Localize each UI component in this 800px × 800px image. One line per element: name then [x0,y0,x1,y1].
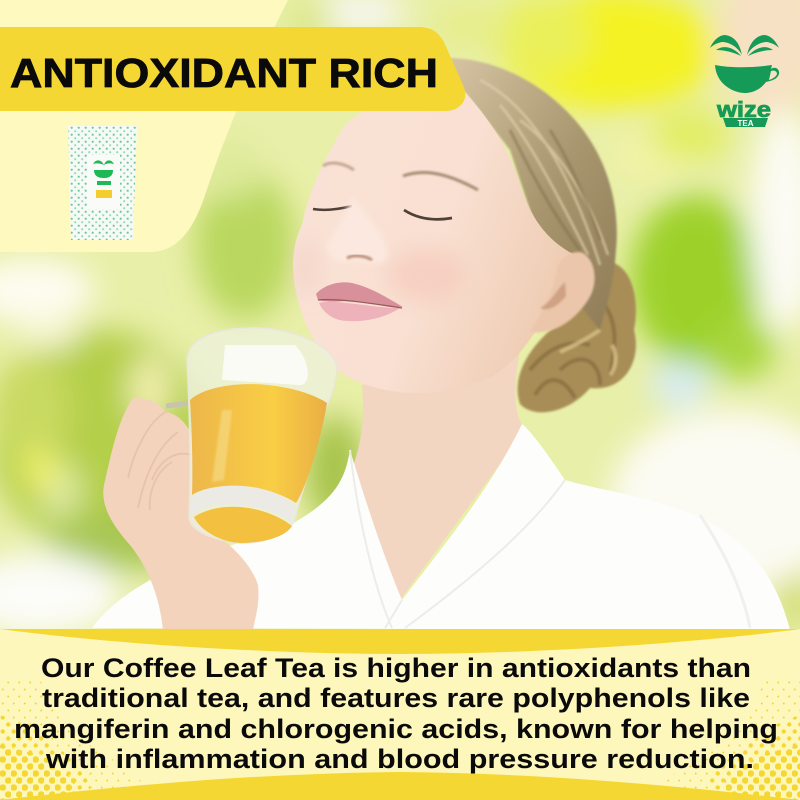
logo tea plate [723,118,768,127]
lips [316,282,403,321]
face [293,90,595,393]
neck [352,350,525,600]
description text: mangiferin and chlorogenic acids, known for helping [14,714,778,744]
left eye lashes [313,206,352,210]
halftone dots right [650,680,800,800]
description text: Our Coffee Leaf Tea is higher in antioxidants than [41,653,751,683]
hair bun [518,262,636,412]
photo: woman sipping tea against a bokeh garden [0,0,800,637]
brand logo [710,35,779,128]
tea in the base [194,507,292,543]
top yellow wedge [0,629,800,654]
description text [14,653,778,774]
tea liquid [190,384,327,503]
logo leaves [710,35,742,55]
left cheek shade [287,246,310,285]
cream panel behind the title [0,0,288,252]
cup handle [166,403,190,406]
nose [329,203,386,262]
silver base band [190,486,295,524]
logo tea text: TEA [738,119,754,128]
bottom yellow wedge [0,772,800,800]
hair [440,58,617,330]
pouch logo [93,160,114,185]
ear shadow [540,282,566,309]
bottom text panel [0,629,800,800]
tea highlight [212,410,232,482]
nostril [347,256,372,260]
blurred bokeh background [0,0,800,637]
robe [92,424,790,630]
product: tea pouch [68,126,137,240]
pouch yellow tag [96,190,112,198]
description text: with inflammation and blood pressure reduction. [45,744,754,774]
pouch label [87,155,120,209]
left eyebrow [323,163,354,170]
logo cup [715,65,779,93]
title text: ANTIOXIDANT RICH [10,50,438,96]
glass reflection [222,345,308,385]
description text: traditional tea, and features rare polyphenols like [42,683,750,713]
hand [103,398,258,630]
blush [390,248,458,302]
glass cup of tea [166,328,337,543]
ear [530,252,595,332]
halftone dots left [0,680,150,800]
right eyebrow [403,173,478,190]
glass [187,328,337,543]
title banner [0,27,465,111]
logo wordmark: wize [716,97,771,122]
right eye lashes [404,210,452,219]
